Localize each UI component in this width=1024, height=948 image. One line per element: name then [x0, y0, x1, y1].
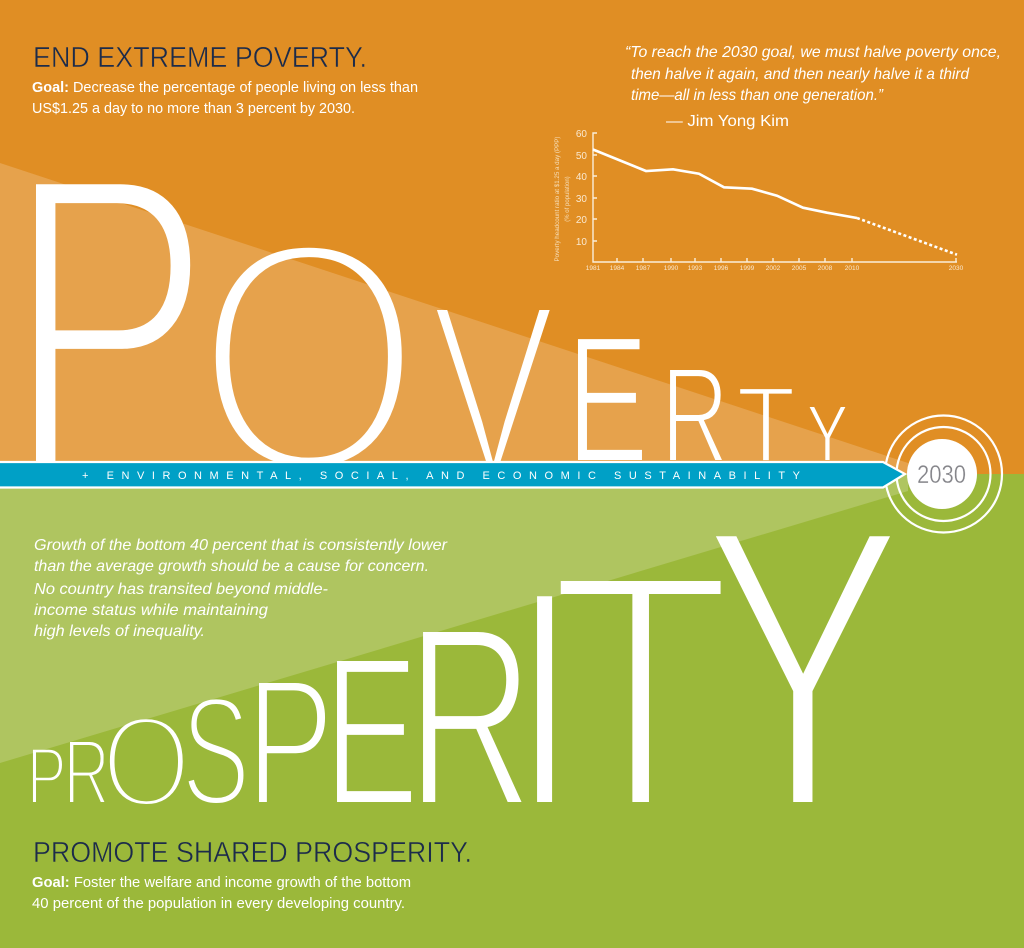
x axis labels: 1984 [610, 265, 625, 272]
y axis labels: 50 [576, 151, 587, 162]
big word: PROSPERITY: O [101, 690, 191, 835]
panel: orange poverty background [0, 0, 1024, 474]
big word: POVERTY: O [195, 173, 423, 543]
x axis labels: 1981 [586, 265, 601, 272]
y axis labels [576, 129, 587, 248]
x axis labels: 1999 [740, 265, 755, 272]
quote: “To reach the 2030 goal, we must halve poverty once, [625, 44, 1001, 61]
text block: prosperity goal: 40 percent of the population in every developing country. [32, 896, 405, 912]
icon: 2030 target rings [885, 416, 1002, 532]
panel: green prosperity background [0, 474, 1024, 948]
big word: PROSPERITY: P [246, 640, 334, 844]
text block: poverty goal [32, 80, 418, 117]
text block: inequality note: No country has transited beyond middle- [34, 581, 328, 598]
big word: POVERTY: R [661, 339, 729, 491]
heading: promote shared prosperity: PROMOTE SHARED PROSPERITY. [33, 837, 472, 869]
y axis title [555, 136, 571, 262]
chart axes [593, 133, 957, 262]
icon: 2030 white disc: 2030 [917, 461, 966, 489]
big word: POVERTY: T [736, 364, 796, 485]
y axis labels: 20 [576, 215, 587, 226]
x axis labels: 2008 [818, 265, 833, 272]
x axis labels: 2005 [792, 265, 807, 272]
y axis title: Poverty headcount ratio at $1.25 a day (PPP) [555, 136, 561, 262]
big word: POVERTY: E [567, 298, 648, 500]
text block: inequality note: than the average growth should be a cause for concern. [34, 558, 429, 575]
big word: PROSPERITY: I [516, 527, 573, 871]
text block: poverty goal: Goal: Decrease the percentage of people living on less than [32, 80, 418, 96]
big word: PROSPERITY: R [406, 573, 534, 860]
big word: PROSPERITY [32, 536, 890, 804]
bar label: sustainability: + ENVIRONMENTAL, SOCIAL, AND ECONOMIC SUSTAINABILITY [82, 470, 801, 482]
big word: PROSPERITY: P [27, 731, 66, 821]
text block: inequality note: Growth of the bottom 40 percent that is consistently lower [34, 537, 448, 554]
big word: POVERTY: V [430, 254, 556, 519]
light green rising triangle [0, 474, 908, 763]
text block: inequality note: high levels of inequality. [34, 623, 205, 640]
text block: inequality note [34, 537, 448, 640]
text block: prosperity goal [32, 875, 411, 912]
icon: 2030 white disc [907, 439, 977, 509]
y axis labels: 10 [576, 237, 587, 248]
big word: PROSPERITY: R [63, 720, 110, 824]
big word: POVERTY: P [6, 87, 211, 559]
text block: poverty goal: US$1.25 a day to no more than 3 percent by 2030. [32, 101, 355, 117]
big word: POVERTY [36, 184, 846, 461]
y axis title: (% of population) [565, 176, 571, 222]
x axis labels: 2030 [949, 265, 964, 272]
x axis labels [586, 265, 964, 272]
big word: PROSPERITY: E [324, 613, 419, 850]
text block: inequality note: income status while maintaining [34, 602, 268, 619]
quote: then halve it again, and then nearly halve it a third [631, 66, 970, 83]
y axis labels: 40 [576, 172, 587, 183]
x axis labels: 1996 [714, 265, 729, 272]
big word: PROSPERITY: T [548, 501, 733, 881]
x axis labels: 1987 [636, 265, 651, 272]
x axis labels: 1993 [688, 265, 703, 272]
big word: PROSPERITY: S [181, 665, 250, 838]
x axis labels: 1990 [664, 265, 679, 272]
x axis labels: 2010 [845, 265, 860, 272]
line chart: poverty headcount ratio [555, 129, 964, 272]
big word: PROSPERITY: Y [701, 443, 905, 895]
arrow: timeline bar to 2030 [0, 462, 905, 488]
actual poverty line [593, 150, 857, 218]
heading: end extreme poverty: END EXTREME POVERTY. [33, 42, 367, 74]
x axis labels: 2002 [766, 265, 781, 272]
projected poverty line to 2030 [857, 218, 957, 255]
light orange declining triangle [0, 163, 908, 474]
big word: POVERTY: Y [807, 389, 848, 479]
quote attribution: — Jim Yong Kim [666, 113, 789, 130]
y axis labels: 60 [576, 129, 587, 140]
quote: time—all in less than one generation.” [631, 87, 884, 104]
text block: prosperity goal: Goal: Foster the welfare and income growth of the bottom [32, 875, 411, 891]
y axis labels: 30 [576, 194, 587, 205]
quote [625, 44, 1001, 104]
